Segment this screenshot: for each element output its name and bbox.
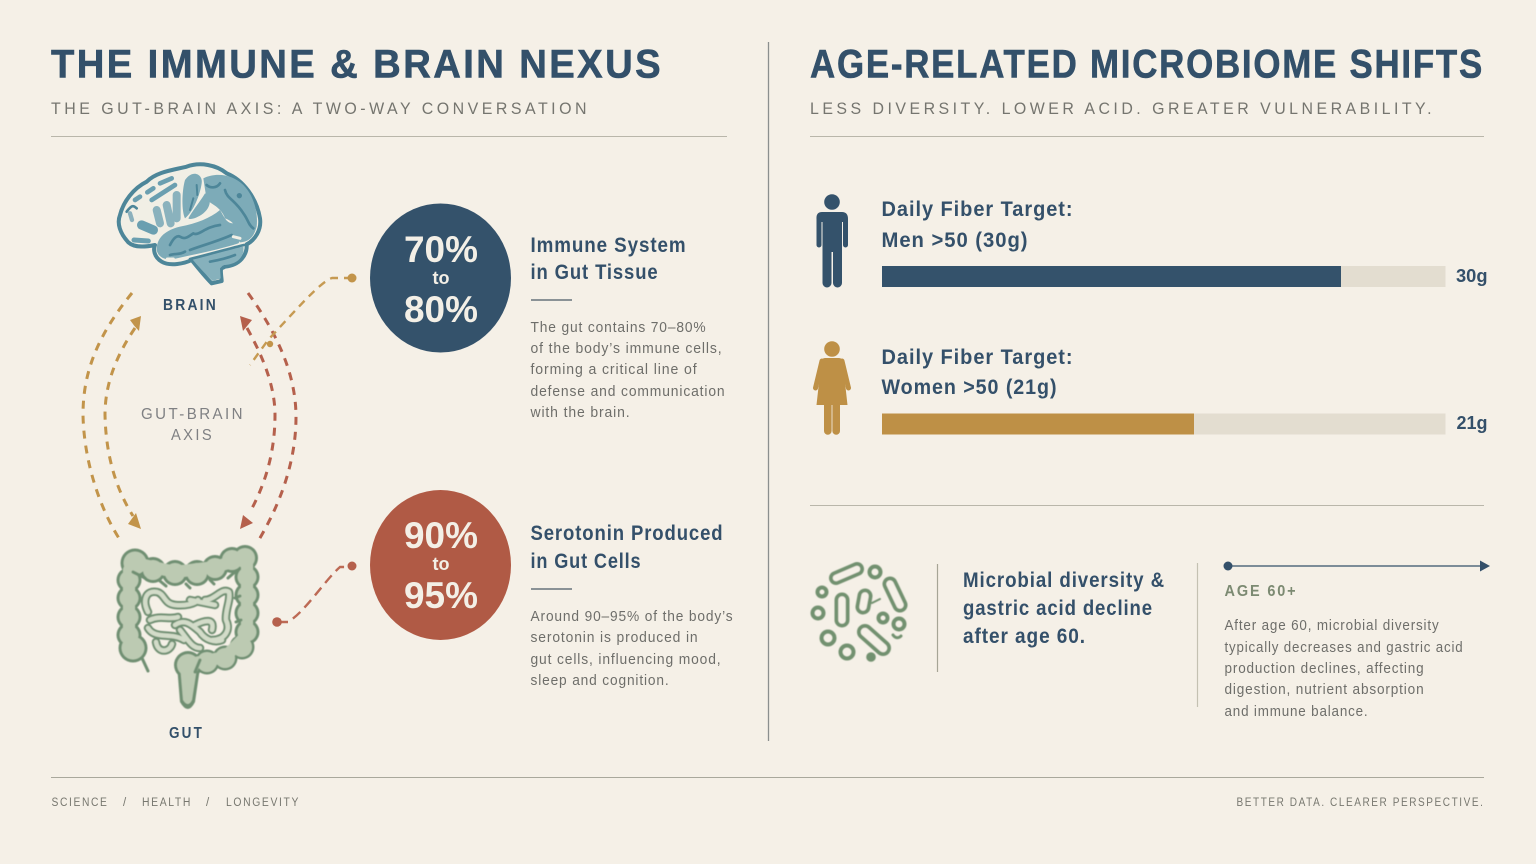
- stat circle: 90% to 95%: 95%: [404, 575, 478, 616]
- axis label: AXIS: [171, 427, 214, 444]
- text block: immune system: defense and communication: [530, 384, 726, 400]
- brain label: BRAIN: [163, 297, 218, 314]
- stat circle: 70% to 80%: 70%: [404, 229, 478, 270]
- fiber target: men: 30g: [1456, 266, 1488, 286]
- left panel subtitle: THE GUT-BRAIN AXIS: A TWO-WAY CONVERSATION: [51, 100, 590, 118]
- fiber target: women: Women >50 (21g): [882, 376, 1058, 399]
- text block: age 60: typically decreases and gastric acid: [1224, 640, 1464, 656]
- text block: immune system: with the brain.: [530, 405, 630, 421]
- stat circle: 90% to 95%: 90%: [404, 515, 478, 556]
- stat circle: 90% to 95%: [370, 490, 511, 640]
- text block: immune system: Immune System: [530, 234, 686, 257]
- text block: serotonin: sleep and cognition.: [530, 673, 670, 689]
- fiber target: women: Daily Fiber Target:: [882, 346, 1074, 369]
- text block: immune system: in Gut Tissue: [530, 261, 658, 284]
- text block: age 60: digestion, nutrient absorption: [1224, 682, 1424, 698]
- gut label: GUT: [169, 725, 204, 742]
- stat circle: 70% to 80%: 80%: [404, 289, 478, 330]
- timeline arrow: [1224, 560, 1490, 572]
- right panel subtitle: LESS DIVERSITY. LOWER ACID. GREATER VULNERABILITY.: [810, 100, 1435, 118]
- footer left: SCIENCE: [52, 797, 108, 809]
- fiber target: men: Daily Fiber Target:: [882, 198, 1074, 221]
- text block: serotonin: gut cells, influencing mood,: [530, 652, 722, 668]
- icon: man: [816, 194, 848, 288]
- stat circle: 90% to 95%: to: [432, 554, 450, 574]
- footer left: /: [123, 797, 128, 809]
- age label: AGE 60+: [1224, 583, 1298, 600]
- fiber target: men: [882, 198, 1488, 287]
- stat circle: 70% to 80%: to: [432, 268, 450, 288]
- footer right: BETTER DATA. CLEARER PERSPECTIVE.: [1236, 797, 1484, 809]
- icon: gut: [116, 545, 260, 709]
- footer left: LONGEVITY: [226, 797, 300, 809]
- icon: brain: [119, 164, 260, 283]
- icon: woman: [816, 341, 848, 435]
- fiber target: women: [882, 346, 1488, 434]
- fiber target: women: 21g: [1456, 413, 1488, 433]
- text block: age 60: [1224, 618, 1464, 720]
- arrows: gold gut-to-brain dashed arcs: [83, 293, 141, 543]
- fiber target: men: Men >50 (30g): [882, 229, 1028, 252]
- connector: gut to serotonin stat: [272, 562, 356, 627]
- footer left: [52, 797, 300, 809]
- icon: microbes: [812, 566, 904, 660]
- text block: immune system: forming a critical line of: [530, 362, 698, 378]
- text block: microbial decline: [963, 569, 1165, 648]
- text block: microbial decline: gastric acid decline: [963, 597, 1153, 620]
- text block: age 60: production declines, affecting: [1224, 661, 1424, 677]
- text block: serotonin: Around 90–95% of the body’s: [530, 609, 734, 625]
- text block: immune system: of the body’s immune cells,: [530, 341, 722, 357]
- text block: microbial decline: after age 60.: [963, 625, 1086, 648]
- text block: serotonin: [530, 522, 734, 689]
- connector: brain to immune stat: [250, 274, 356, 365]
- footer left: HEALTH: [142, 797, 192, 809]
- text block: age 60: and immune balance.: [1224, 704, 1368, 720]
- stat circle: 70% to 80%: [370, 204, 511, 352]
- text block: immune system: The gut contains 70–80%: [530, 320, 706, 336]
- footer left: /: [206, 797, 211, 809]
- text block: serotonin: in Gut Cells: [530, 550, 642, 573]
- text block: serotonin: serotonin is produced in: [530, 630, 698, 646]
- axis label: [141, 406, 245, 444]
- text block: serotonin: Serotonin Produced: [530, 522, 724, 545]
- text block: immune system: [530, 234, 726, 421]
- text block: age 60: After age 60, microbial diversity: [1224, 618, 1440, 634]
- left panel title: THE IMMUNE & BRAIN NEXUS: [51, 42, 663, 86]
- text block: microbial decline: Microbial diversity &: [963, 569, 1165, 592]
- axis label: GUT-BRAIN: [141, 406, 245, 423]
- arrows: red brain-to-gut dashed arcs: [240, 293, 296, 543]
